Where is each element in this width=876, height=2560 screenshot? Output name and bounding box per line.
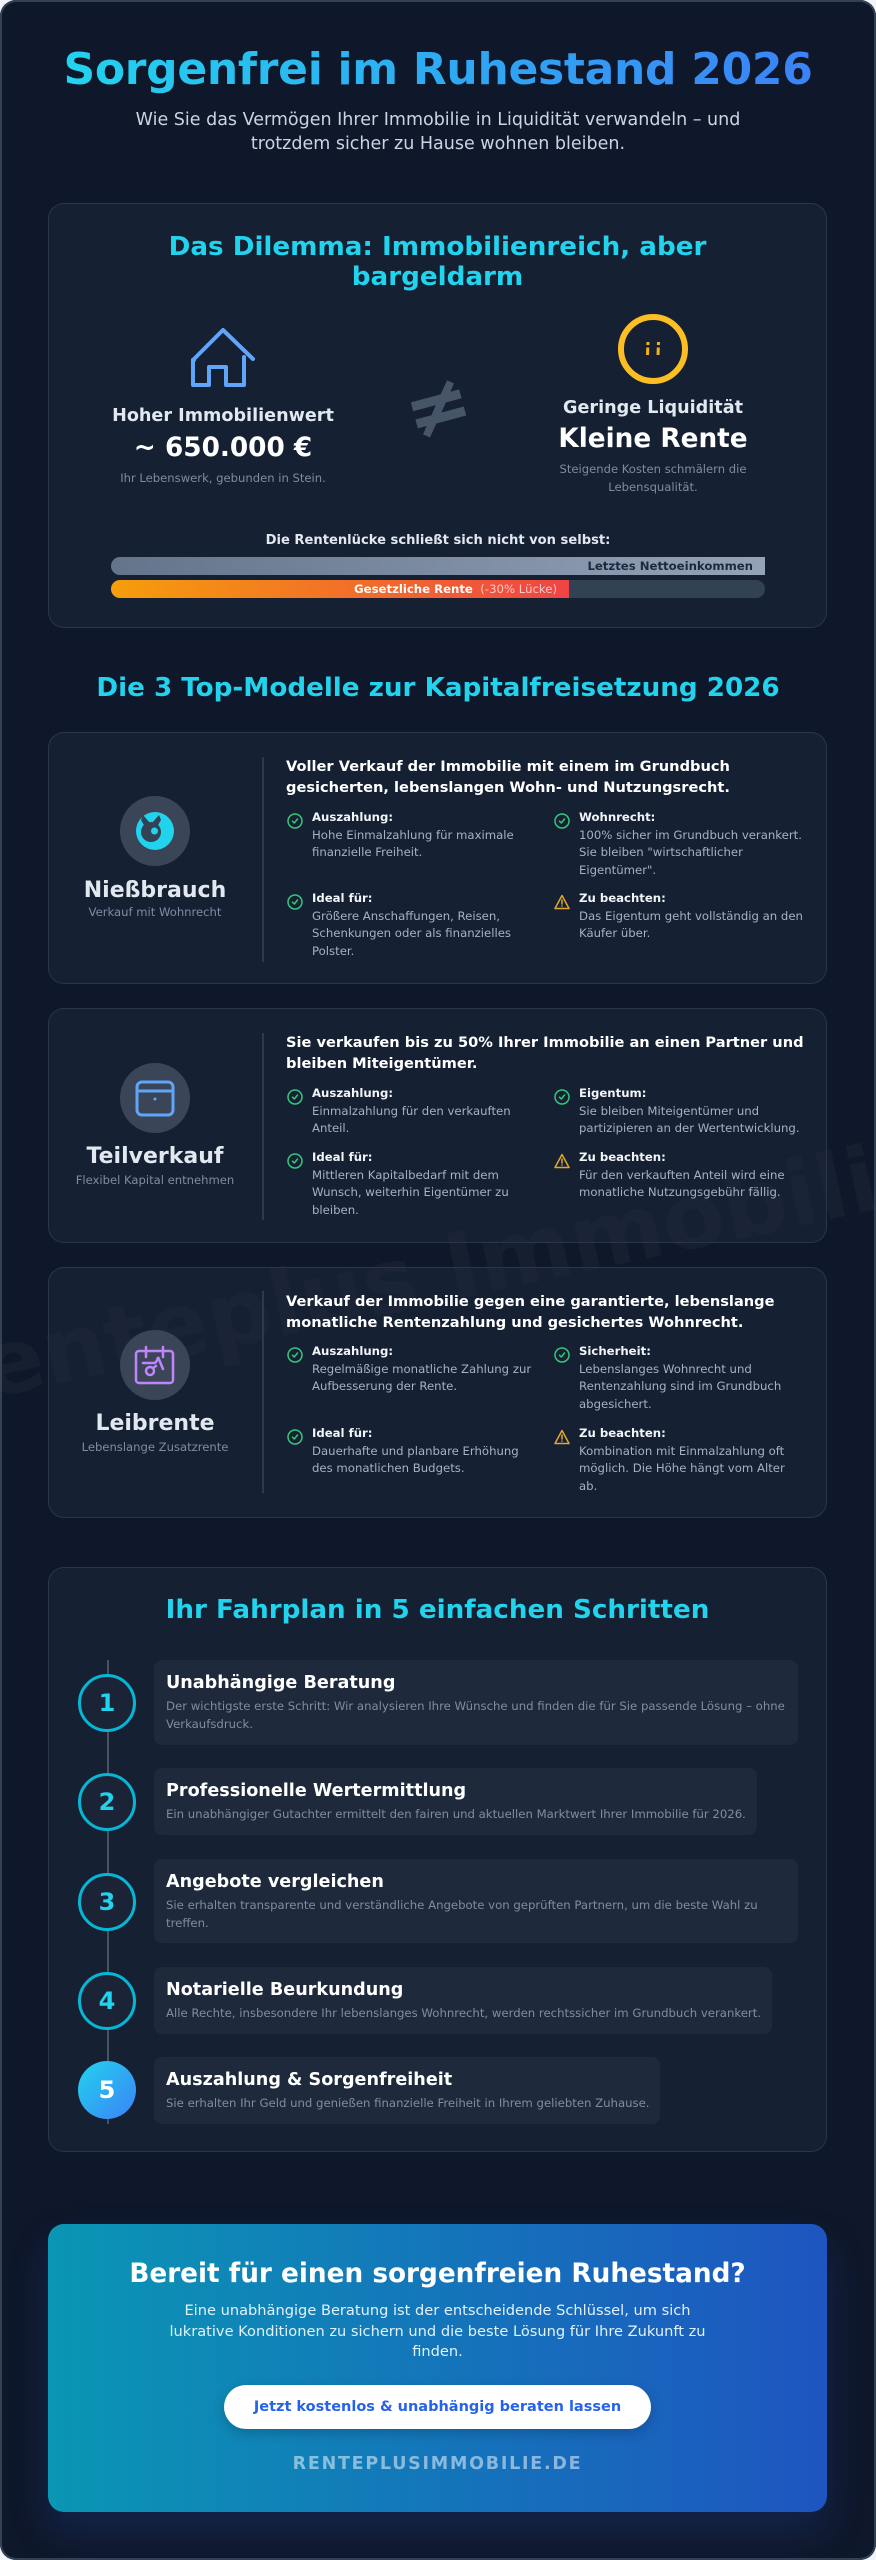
heading: roadmap: Ihr Fahrplan in 5 einfachen Schritten <box>166 1595 709 1625</box>
bar: statutory pension <box>111 580 765 598</box>
model name: Nießbrauch <box>84 878 226 903</box>
step 4 <box>78 1967 772 2034</box>
icon: usufruct <box>120 796 190 866</box>
model description: Sie verkaufen bis zu 50% Ihrer Immobilie an einen Partner und <box>286 1034 804 1051</box>
panel: roadmap <box>48 1567 827 2152</box>
step 3: 3 <box>99 1888 115 1916</box>
text: cta: Eine unabhängige Beratung ist der entscheidende Schlüssel, um sich <box>184 2302 691 2319</box>
detail: Zu beachten: Käufer über. <box>579 926 650 940</box>
panel: dilemma <box>48 203 827 628</box>
model subtitle: Verkauf mit Wohnrecht <box>89 905 221 919</box>
detail: Zu beachten: Kombination mit Einmalzahlung oft <box>579 1444 784 1458</box>
model description: gesicherten, lebenslangen Wohn- und Nutzungsrecht. <box>286 779 730 796</box>
detail: Ideal für: des monatlichen Budgets. <box>312 1461 465 1475</box>
model description: Voller Verkauf der Immobilie mit einem im Grundbuch <box>286 758 730 775</box>
bar: last net income <box>111 557 765 575</box>
panel: Teilverkauf <box>48 1008 827 1243</box>
model subtitle: Lebenslange Zusatzrente <box>82 1440 228 1454</box>
detail: Zu beachten <box>554 891 803 940</box>
heading: cta: Bereit für einen sorgenfreien Ruhestand? <box>129 2259 746 2289</box>
step 2: Professionelle Wertermittlung <box>166 1781 466 1801</box>
detail: Ideal für: bleiben. <box>312 1203 359 1217</box>
detail: Sicherheit <box>554 1344 781 1411</box>
panel: call to action <box>48 2224 827 2512</box>
detail: Ideal für: Schenkungen oder als finanzielles <box>312 926 511 940</box>
detail: Zu beachten: monatliche Nutzungsgebühr fällig. <box>579 1185 781 1199</box>
button: Jetzt kostenlos & unabhängig beraten lassen <box>254 2399 621 2415</box>
detail: Auszahlung <box>287 1086 511 1135</box>
bar: last net income: Letztes Nettoeinkommen <box>587 559 753 573</box>
detail: Zu beachten: Das Eigentum geht vollständig an den <box>579 909 803 923</box>
heading: dilemma: bargeldarm <box>352 262 523 292</box>
step 1: Verkaufsdruck. <box>166 1717 253 1731</box>
detail: Ideal für <box>287 1426 519 1475</box>
step 1: Der wichtigste erste Schritt: Wir analysieren Ihre Wünsche und finden die für Sie passende Lösung – ohne <box>166 1699 785 1713</box>
step 4: Notarielle Beurkundung <box>166 1980 403 2000</box>
detail: Wohnrecht: 100% sicher im Grundbuch verankert. <box>579 828 802 842</box>
detail: Wohnrecht: Sie bleiben "wirtschaftlicher <box>579 845 743 859</box>
right value block: Geringe Liquidität <box>563 398 743 418</box>
detail: Ideal für: Polster. <box>312 944 354 958</box>
step 5 <box>78 2057 660 2124</box>
icon: house <box>190 328 256 387</box>
detail: Auszahlung: Auszahlung: <box>312 1344 393 1358</box>
detail: Sicherheit: Sicherheit: <box>579 1344 651 1358</box>
detail: Ideal für <box>287 891 511 958</box>
detail: Sicherheit: Lebenslanges Wohnrecht und <box>579 1362 752 1376</box>
detail: Zu beachten: Für den verkauften Anteil wird eine <box>579 1168 785 1182</box>
title: Sorgenfrei im Ruhestand 2026 <box>63 44 813 95</box>
step 3: treffen. <box>166 1916 209 1930</box>
step 4: Alle Rechte, insbesondere Ihr lebenslanges Wohnrecht, werden rechtssicher im Grundbuch verankert. <box>166 2006 761 2020</box>
model description: Verkauf der Immobilie gegen eine garantierte, lebenslange <box>286 1293 775 1310</box>
detail: Auszahlung: Auszahlung: <box>312 1086 393 1100</box>
text: cta <box>169 2302 706 2360</box>
text: cta: finden. <box>412 2343 463 2360</box>
detail: Eigentum: Eigentum: <box>579 1086 646 1100</box>
left value block: ~ 650.000 € <box>134 433 312 463</box>
website: RENTEPLUSIMMOBILIE.DE <box>293 2454 582 2474</box>
subtitle: Wie Sie das Vermögen Ihrer Immobilie in Liquidität verwandeln – und <box>136 110 740 130</box>
detail: Wohnrecht <box>554 810 802 877</box>
detail: Auszahlung: Aufbesserung der Rente. <box>312 1379 457 1393</box>
icon: not equal: ≠ <box>393 353 482 460</box>
model name: Teilverkauf <box>87 1144 223 1169</box>
detail: Zu beachten: ab. <box>579 1479 597 1493</box>
pension gap comparison: Die Rentenlücke schließt sich nicht von selbst: <box>266 533 610 548</box>
model name: Leibrente <box>95 1411 215 1436</box>
detail: Ideal für: Dauerhafte und planbare Erhöhung <box>312 1444 519 1458</box>
detail: Eigentum <box>554 1086 800 1135</box>
detail: Auszahlung: Hohe Einmalzahlung für maximale <box>312 828 514 842</box>
detail: Zu beachten: möglich. Die Höhe hängt vom Alter <box>579 1461 785 1475</box>
detail: Sicherheit: Rentenzahlung sind im Grundbuch <box>579 1379 781 1393</box>
step 5: 5 <box>99 2076 115 2104</box>
step 5: Sie erhalten Ihr Geld und genießen finanzielle Freiheit in Ihrem geliebten Zuhause. <box>166 2096 650 2110</box>
button <box>224 2385 651 2429</box>
step 2: 2 <box>99 1788 115 1816</box>
detail: Zu beachten: Zu beachten: <box>579 1150 666 1164</box>
detail: Ideal für: Ideal für: <box>312 891 372 905</box>
step 3: Sie erhalten transparente und verständliche Angebote von geprüften Partnern, um die beste Wahl zu <box>166 1898 758 1912</box>
icon: partial sale <box>120 1063 190 1133</box>
right value block: Kleine Rente <box>558 424 748 454</box>
detail: Zu beachten <box>554 1150 785 1199</box>
heading: dilemma <box>169 232 706 292</box>
model subtitle: Flexibel Kapital entnehmen <box>76 1173 234 1187</box>
step 4: 4 <box>99 1987 115 2015</box>
step 5: Auszahlung & Sorgenfreiheit <box>166 2070 452 2090</box>
detail: Zu beachten: Zu beachten: <box>579 1426 666 1440</box>
detail: Auszahlung: Auszahlung: <box>312 810 393 824</box>
detail: Eigentum: Sie bleiben Miteigentümer und <box>579 1104 759 1118</box>
right value block <box>558 398 748 494</box>
model description <box>286 1293 775 1331</box>
detail: Auszahlung: finanzielle Freiheit. <box>312 845 422 859</box>
detail: Wohnrecht: Eigentümer". <box>579 863 656 877</box>
detail: Auszahlung: Anteil. <box>312 1121 349 1135</box>
detail: Sicherheit: abgesichert. <box>579 1397 652 1411</box>
detail: Auszahlung <box>287 1344 532 1393</box>
icon: coin <box>618 314 688 384</box>
right value block: Lebensqualität. <box>608 480 698 494</box>
model description <box>286 1034 804 1072</box>
bar: statutory pension: Gesetzliche Rente (-30% Lücke) <box>354 582 557 596</box>
left value block: Hoher Immobilienwert <box>112 406 334 426</box>
detail: Ideal für: Ideal für: <box>312 1150 372 1164</box>
model description: monatliche Rentenzahlung und gesichertes Wohnrecht. <box>286 1314 743 1331</box>
detail: Auszahlung <box>287 810 514 859</box>
detail: Zu beachten: Zu beachten: <box>579 891 666 905</box>
detail: Auszahlung: Einmalzahlung für den verkauften <box>312 1104 511 1118</box>
detail: Ideal für: Wunsch, weiterhin Eigentümer zu <box>312 1185 509 1199</box>
step 2: Ein unabhängiger Gutachter ermittelt den fairen und aktuellen Marktwert Ihrer Immobilie für 2026. <box>166 1807 746 1821</box>
right value block: Steigende Kosten schmälern die <box>560 462 746 476</box>
detail: Ideal für: Ideal für: <box>312 1426 372 1440</box>
pension gap comparison <box>111 533 765 598</box>
text: cta: lukrative Konditionen zu sichern und die beste Lösung für Ihre Zukunft zu <box>169 2323 706 2340</box>
left value block <box>112 406 334 485</box>
icon: life annuity <box>120 1330 190 1400</box>
left value block: Ihr Lebenswerk, gebunden in Stein. <box>120 471 326 485</box>
model description <box>286 758 730 796</box>
detail: Ideal für: Mittleren Kapitalbedarf mit dem <box>312 1168 499 1182</box>
step 3 <box>78 1859 798 1943</box>
model description: bleiben Miteigentümer. <box>286 1055 477 1072</box>
detail: Zu beachten <box>554 1426 785 1493</box>
heading: models: Die 3 Top-Modelle zur Kapitalfreisetzung 2026 <box>96 673 780 703</box>
step 1: Unabhängige Beratung <box>166 1673 395 1693</box>
step 1 <box>78 1660 798 1745</box>
step 2 <box>78 1768 757 1835</box>
panel: Leibrente <box>48 1267 827 1518</box>
heading: dilemma: Das Dilemma: Immobilienreich, aber <box>169 232 706 262</box>
subtitle <box>136 110 740 154</box>
detail: Auszahlung: Regelmäßige monatliche Zahlung zur <box>312 1362 531 1376</box>
detail: Ideal für: Größere Anschaffungen, Reisen, <box>312 909 500 923</box>
detail: Wohnrecht: Wohnrecht: <box>579 810 655 824</box>
detail: Eigentum: partizipieren an der Wertentwicklung. <box>579 1121 800 1135</box>
panel: Nießbrauch <box>48 732 827 984</box>
subtitle: trotzdem sicher zu Hause wohnen bleiben. <box>251 134 625 154</box>
step 1: 1 <box>99 1689 115 1717</box>
detail: Ideal für <box>287 1150 509 1217</box>
step 3: Angebote vergleichen <box>166 1872 384 1892</box>
